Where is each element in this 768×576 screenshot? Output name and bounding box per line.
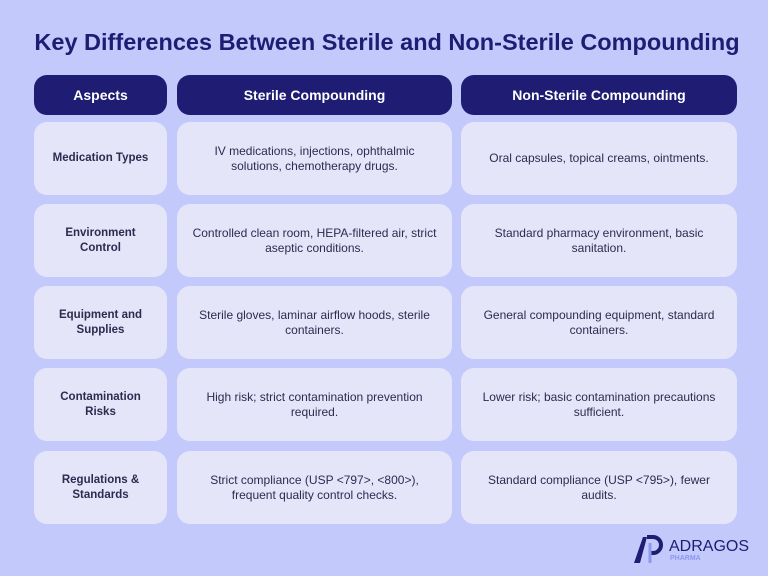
row 3 non-sterile: General compounding equipment, standard containers. (484, 308, 714, 336)
row 4 label (34, 368, 167, 441)
row 2 non-sterile (461, 204, 737, 277)
row 2 sterile (177, 204, 452, 277)
row 1 sterile (177, 122, 452, 195)
logo text: ADRAGOS (669, 538, 749, 555)
row 2 sterile: Controlled clean room, HEPA-filtered air, strict aseptic conditions. (193, 226, 436, 254)
row 5 sterile (177, 451, 452, 524)
row 4 sterile: High risk; strict contamination prevention required. (206, 390, 423, 418)
row 2 non-sterile: Standard pharmacy environment, basic sanitation. (495, 226, 703, 254)
row 1 label (34, 122, 167, 195)
logo (634, 535, 749, 563)
row 1 non-sterile (461, 122, 737, 195)
row 3 sterile (177, 286, 452, 359)
row 5 non-sterile: Standard compliance (USP <795>), fewer audits. (488, 472, 710, 502)
row 4 non-sterile: Lower risk; basic contamination precautions sufficient. (483, 390, 715, 418)
row 2 label: Environment Control (65, 226, 136, 254)
header: aspects: Aspects (73, 87, 128, 103)
row 3 non-sterile (461, 286, 737, 359)
header: non-sterile (461, 75, 737, 115)
row 1 sterile: IV medications, injections, ophthalmic solutions, chemotherapy drugs. (214, 144, 415, 172)
row 3 label (34, 286, 167, 359)
row 1 label: Medication Types (53, 152, 148, 164)
row 3 label: Equipment and Supplies (59, 308, 142, 336)
row 5 non-sterile (461, 451, 737, 524)
row 5 label (34, 451, 167, 524)
row 3 sterile: Sterile gloves, laminar airflow hoods, sterile containers. (199, 308, 430, 336)
header: sterile: Sterile Compounding (244, 87, 385, 103)
row 2 label (34, 204, 167, 277)
row 1 non-sterile: Oral capsules, topical creams, ointments. (489, 151, 709, 165)
row 5 sterile: Strict compliance (USP <797>, <800>), frequent quality control checks. (210, 472, 419, 502)
header: non-sterile: Non-Sterile Compounding (512, 87, 686, 103)
header: sterile (177, 75, 452, 115)
row 4 non-sterile (461, 368, 737, 441)
icon: logo mark (634, 535, 663, 563)
row 4 sterile (177, 368, 452, 441)
row 4 label: Contamination Risks (60, 390, 141, 418)
row 5 label: Regulations & Standards (62, 474, 139, 500)
title: Key Differences Between Sterile and Non-Sterile Compounding (34, 29, 740, 55)
header: aspects (34, 75, 167, 115)
logo: PHARMA (670, 555, 701, 562)
